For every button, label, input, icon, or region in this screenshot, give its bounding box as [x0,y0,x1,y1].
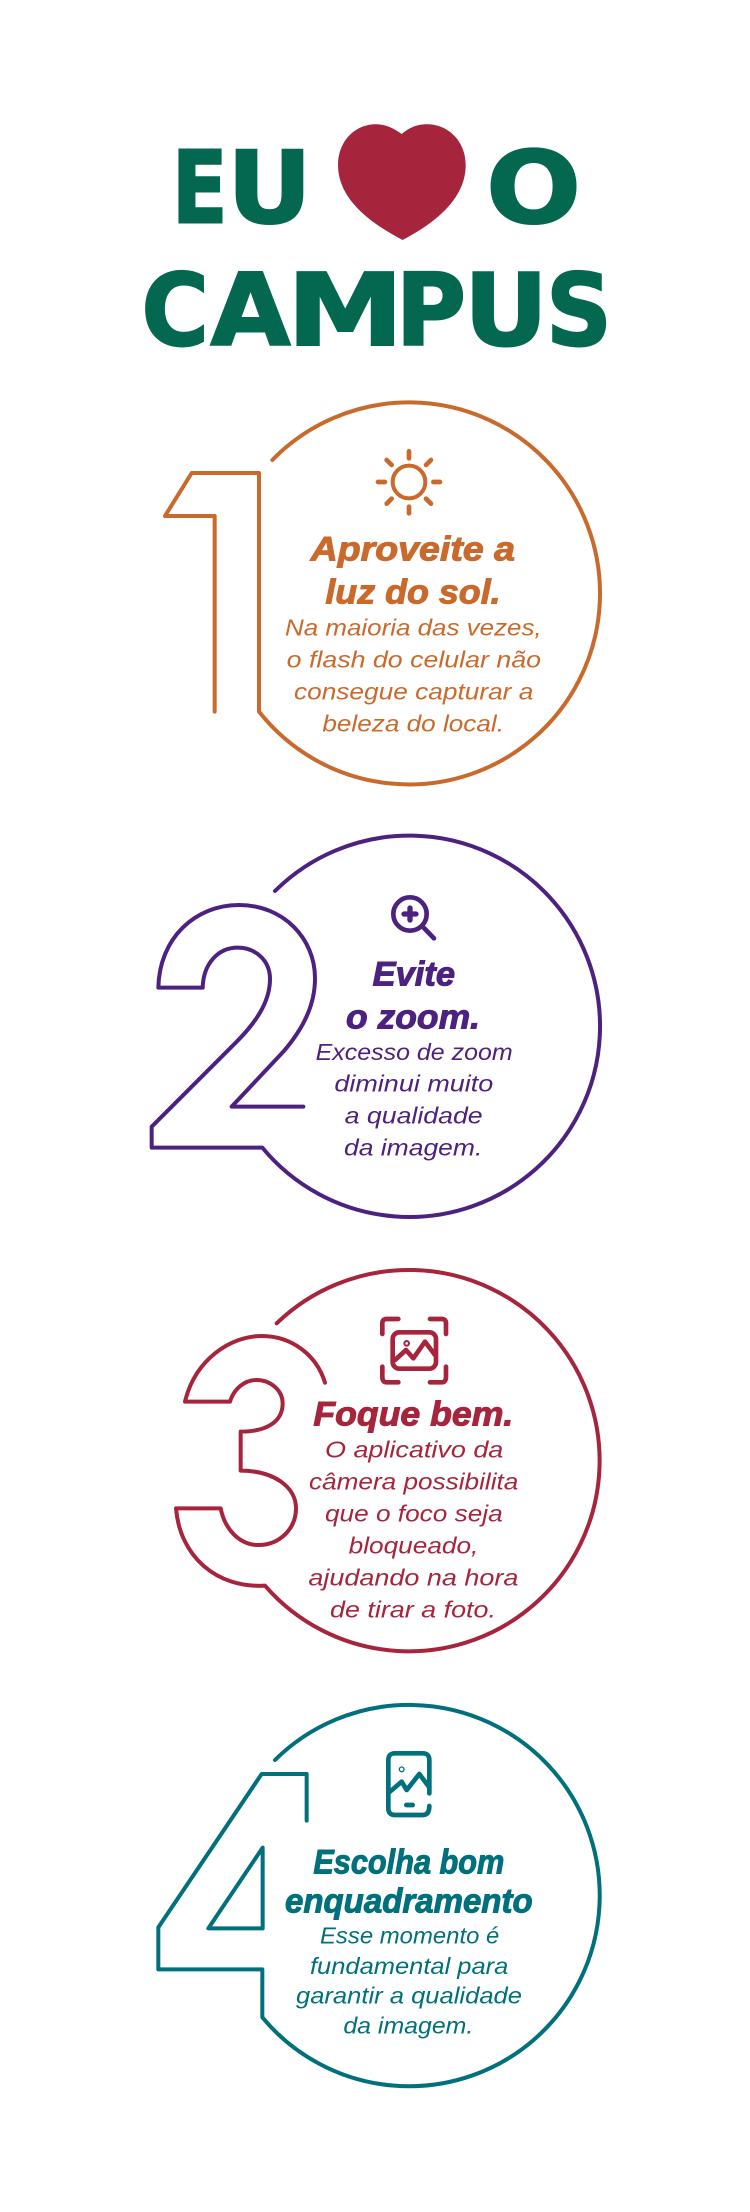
panel: tip 2 [152,836,600,1217]
body text: câmera possibilita [309,1469,518,1495]
body text: a qualidade [345,1103,483,1129]
icon: magnifier [393,897,434,938]
title [142,124,612,369]
title line 2: CAMPUS: P [396,252,466,369]
heading: Evite [373,956,455,994]
body text: consegue capturar a [294,678,533,704]
body text [316,1039,513,1161]
body text: beleza do local. [322,710,504,736]
body text: Esse momento é [320,1922,499,1948]
body text: diminui muito [334,1071,493,1097]
icon: focus frame with picture [382,1319,446,1382]
heading: o zoom. [346,998,480,1036]
body text: ajudando na hora [308,1564,518,1590]
title line 1 word: EU: E [172,129,228,246]
heading [346,956,480,1036]
heading: luz do sol. [325,573,501,611]
icon: phone with picture [388,1753,429,1815]
heading: enquadramento [285,1883,533,1921]
body text: Na maioria das vezes, [285,615,542,641]
icon: heart [338,124,466,240]
title line 2: CAMPUS: C [142,252,209,369]
numeral 4 with circle outline [158,1705,600,2086]
panel: tip 4 [158,1705,600,2086]
title line 2: CAMPUS: S [546,252,612,369]
body text [296,1922,522,2038]
title line 1 word: EU: U [227,129,312,246]
numeral 3 with circle outline [176,1270,600,1651]
body text: bloqueado, [349,1532,478,1558]
heading: Escolha bom [313,1843,504,1881]
body text: Excesso de zoom [316,1039,513,1065]
title line 2: CAMPUS [142,252,612,369]
body text: da imagem. [343,2012,473,2038]
title line 2: CAMPUS: A [210,252,290,369]
heading: Aproveite a [310,531,515,569]
numeral 1 with circle outline [165,402,600,784]
body text: fundamental para [310,1953,508,1979]
panel: tip 1 [165,402,600,784]
numeral 2 with circle outline [152,836,600,1217]
title line 2: CAMPUS: M [287,252,404,369]
icon: sun [378,451,440,513]
body text [308,1437,518,1622]
heading: Foque bem. [313,1396,513,1434]
heading [310,531,515,611]
body text: garantir a qualidade [296,1982,522,2008]
title line 2: CAMPUS: U [464,252,548,369]
heading [285,1843,533,1921]
body text: O aplicativo da [325,1437,503,1463]
body text: o flash do celular não [287,646,541,672]
body text: de tirar a foto. [330,1596,496,1622]
body text: da imagem. [344,1135,482,1161]
body text [285,615,542,736]
title line 1 word: EU [172,129,312,246]
body text: que o foco seja [325,1501,503,1527]
title line 1 word: O: O [486,129,581,246]
panel: tip 3 [176,1270,600,1651]
